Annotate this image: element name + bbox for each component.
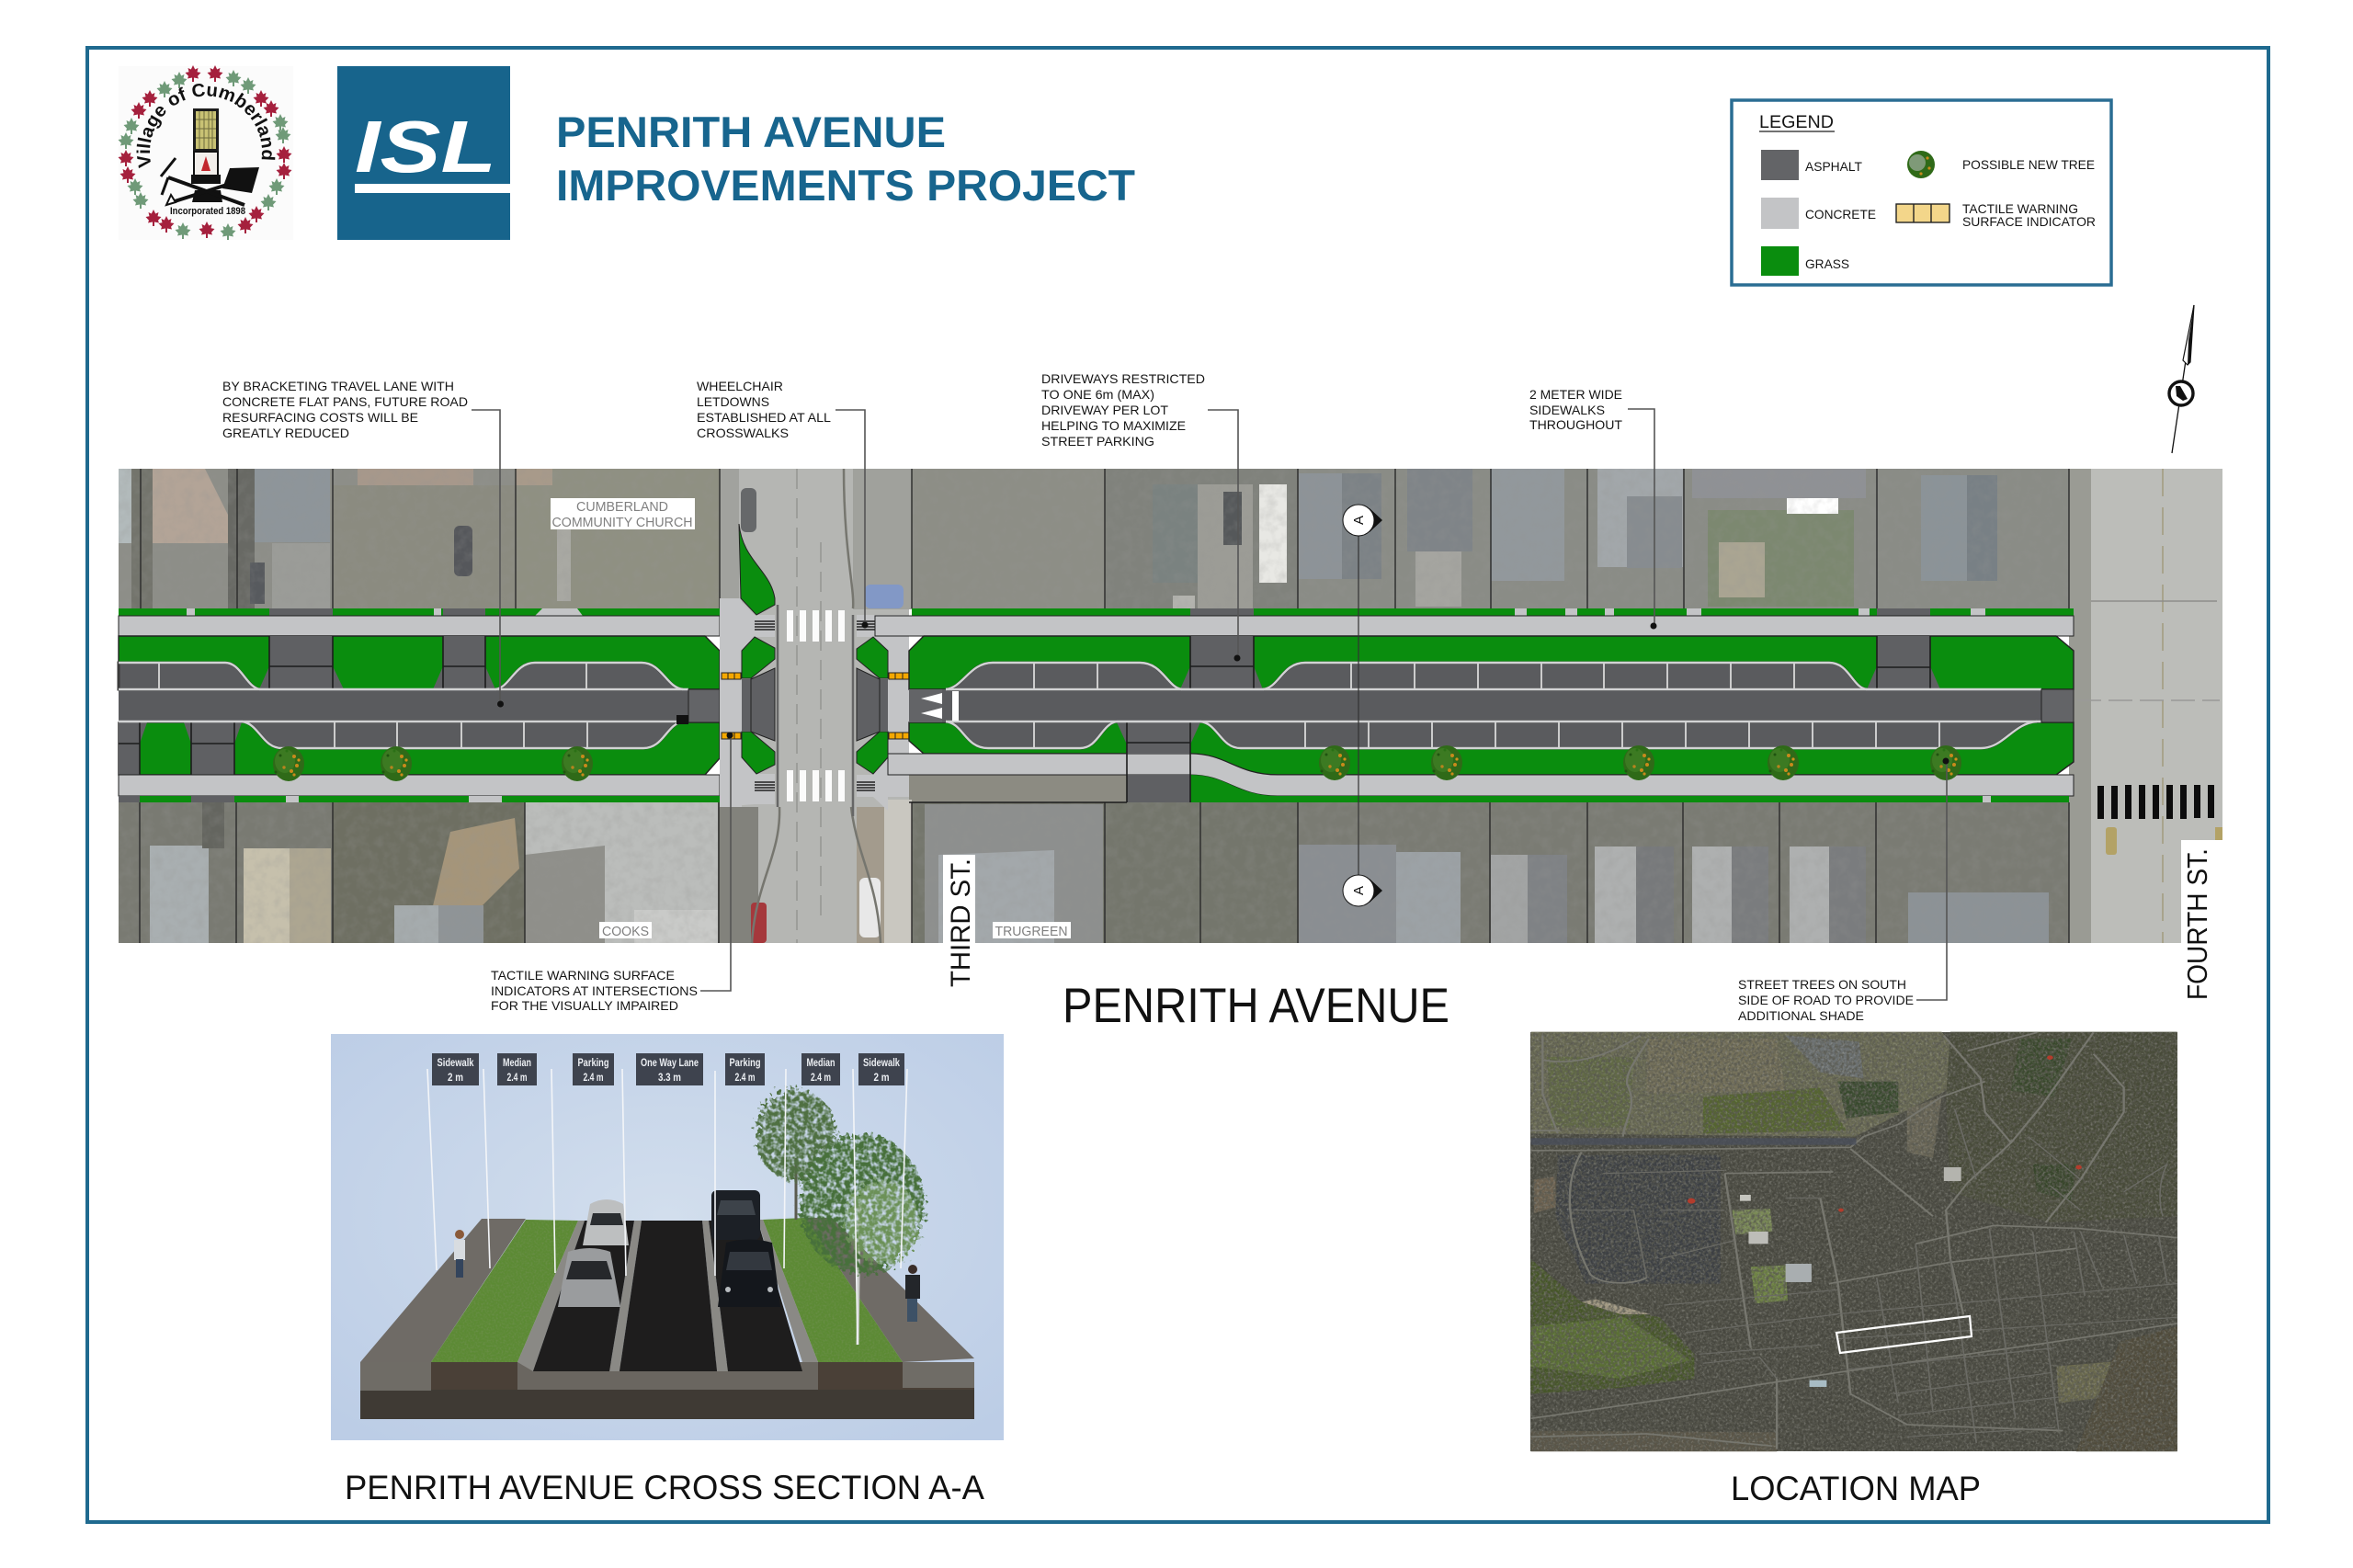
aerial: north side east block — [912, 469, 2069, 609]
tag: parking left: 2.4 m — [583, 1071, 603, 1084]
lane arrows — [921, 691, 959, 721]
sidewalks — [360, 1218, 974, 1362]
pedestrian right — [905, 1265, 920, 1322]
legend item: asphalt — [1761, 150, 1862, 180]
tag: one way lane: 3.3 m — [658, 1071, 681, 1084]
callout: 2 meter sidewalks: 2 METER WIDE — [1529, 387, 1622, 402]
panel: legend — [1732, 100, 2111, 285]
tag: sidewalk left: 2 m — [448, 1071, 463, 1084]
panel: legend: LEGEND — [1759, 113, 1834, 132]
grass texture left — [431, 1220, 578, 1362]
tag: parking left — [573, 1053, 614, 1085]
north boulevard — [119, 636, 720, 689]
map buildings — [1531, 1055, 2082, 1387]
curb lines at Third St — [778, 605, 853, 816]
crosswalk at Fourth St — [2097, 785, 2214, 819]
trees — [756, 1089, 925, 1345]
aerial: Fourth Street roadway — [2069, 469, 2222, 943]
legend item: grass: GRASS — [1805, 256, 1849, 271]
south green strip east — [1190, 775, 2069, 802]
dimension tags — [432, 1053, 904, 1085]
map dark speckle — [1530, 1032, 2177, 1451]
tag: median left — [497, 1053, 537, 1085]
tag: one way lane: One Way Lane — [641, 1056, 699, 1069]
callout: wheelchair letdowns: ESTABLISHED AT ALL — [697, 410, 831, 425]
section marker top: A — [1351, 516, 1367, 525]
title — [556, 108, 1135, 210]
aerial: south side west block — [119, 802, 720, 943]
crosswalks at Third St — [787, 610, 845, 801]
section marker top — [1343, 505, 1382, 536]
callout: street trees: SIDE OF ROAD TO PROVIDE — [1738, 993, 1914, 1007]
driveways south — [119, 722, 242, 775]
pedestrian left — [454, 1230, 465, 1278]
lane end block — [688, 689, 720, 722]
curved south sidewalk — [888, 754, 2074, 796]
callout: concrete flat pans: BY BRACKETING TRAVEL LANE WITH — [222, 379, 454, 393]
legend item: tactile warning surface indicator: TACTILE WARNING — [1962, 201, 2078, 216]
legend item: possible new tree: POSSIBLE NEW TREE — [1962, 157, 2095, 172]
street label: Fourth St: FOURTH ST. — [2181, 848, 2213, 1000]
small south strip crossing — [1983, 796, 1991, 802]
tag: sidewalk left — [432, 1053, 479, 1085]
driveways north east — [1180, 636, 1940, 689]
caption: location map: LOCATION MAP — [1731, 1470, 1981, 1507]
tag: median right — [801, 1053, 840, 1085]
aerial: Third Street roadway — [720, 469, 912, 943]
callout: concrete flat pans: RESURFACING COSTS WILL BE — [222, 410, 418, 425]
tag: one way lane — [636, 1053, 703, 1085]
tactile indicators west — [722, 673, 741, 739]
lane edges east — [946, 689, 2041, 722]
south boulevard strip — [119, 796, 720, 802]
aerial: south side east block — [909, 775, 2069, 943]
parking bays west — [119, 663, 683, 748]
callout: driveways restricted: DRIVEWAY PER LOT — [1041, 403, 1168, 417]
icon: north arrow — [2169, 305, 2194, 453]
panel: street plan with aerial background — [119, 469, 2222, 943]
panel: cross section A-A rendering — [331, 1034, 1004, 1440]
tag: parking left: Parking — [577, 1056, 608, 1069]
south sidewalk — [119, 775, 720, 796]
legend item: grass — [1761, 246, 1849, 276]
tag: sidewalk right — [858, 1053, 904, 1085]
car: black truck — [711, 1190, 760, 1240]
logo: Village of Cumberland crest: Incorporated 1898 — [170, 206, 245, 217]
street surface: east block — [875, 608, 2074, 802]
label: Cooks: COOKS — [602, 924, 649, 939]
soil and gravel layers — [360, 1362, 974, 1419]
tag: parking right: Parking — [730, 1056, 761, 1069]
callout: driveways restricted: HELPING TO MAXIMIZE — [1041, 418, 1186, 433]
logo: Village of Cumberland crest — [118, 65, 292, 240]
title: PENRITH AVENUE — [556, 108, 946, 156]
section marker bottom — [1343, 875, 1382, 906]
callout: concrete flat pans: GREATLY REDUCED — [222, 426, 349, 440]
callout: wheelchair letdowns: CROSSWALKS — [697, 426, 789, 440]
pedestrians — [454, 1230, 920, 1322]
callout: driveways restricted: STREET PARKING — [1041, 434, 1154, 449]
asphalt road — [533, 1220, 802, 1371]
travel lane east — [909, 689, 2074, 722]
grass medians — [431, 1218, 903, 1362]
tag: parking right: 2.4 m — [735, 1071, 756, 1084]
tag: median left: Median — [503, 1056, 531, 1069]
callout: 2 meter sidewalks: THROUGHOUT — [1529, 417, 1622, 432]
south boulevard — [119, 722, 720, 775]
south boulevard east — [909, 722, 2074, 775]
callout: street trees — [1738, 757, 1949, 1023]
north boulevard east — [909, 636, 2074, 689]
street surface: east curb bulbs at Third St — [857, 615, 909, 811]
legend item: possible new tree — [1907, 151, 2095, 178]
tag: sidewalk right: 2 m — [873, 1071, 890, 1084]
lane edges west — [119, 689, 688, 722]
aerial texture — [119, 469, 2069, 609]
lane end block at Third St — [909, 689, 942, 722]
north sidewalk east — [875, 616, 2074, 636]
parking bays east — [946, 663, 2037, 748]
car: silver rear — [583, 1199, 629, 1245]
heading: Penrith Avenue: PENRITH AVENUE — [1063, 979, 1449, 1033]
car: silver front — [558, 1248, 620, 1307]
callout: wheelchair letdowns: WHEELCHAIR — [697, 379, 783, 393]
car: black sedan — [718, 1239, 780, 1307]
tag: median right: 2.4 m — [811, 1071, 831, 1084]
logo: Village of Cumberland crest: Village of Cumberland — [136, 84, 276, 169]
tactile indicators east — [889, 673, 909, 739]
label: Cumberland Community Church: COMMUNITY CHURCH — [551, 515, 693, 530]
dark driveway crossings — [909, 722, 1200, 802]
aerial: north side west block — [119, 469, 720, 609]
title: IMPROVEMENTS PROJECT — [556, 161, 1135, 210]
lane end block east — [2041, 689, 2074, 722]
logo: ISL — [337, 66, 510, 240]
north sidewalk — [119, 616, 720, 636]
callout: street trees: STREET TREES ON SOUTH — [1738, 977, 1906, 992]
legend item: concrete: CONCRETE — [1805, 207, 1876, 222]
tag: median right: Median — [807, 1056, 835, 1069]
tag: sidewalk left: Sidewalk — [438, 1056, 474, 1069]
aerial texture south — [119, 802, 2069, 943]
callout: wheelchair letdowns — [697, 379, 868, 629]
legend item: asphalt: ASPHALT — [1805, 159, 1862, 174]
section marker bottom: A — [1351, 886, 1367, 895]
label: Cumberland Community Church: CUMBERLAND — [576, 499, 668, 515]
ramp stripes — [755, 621, 775, 790]
callout: street trees: ADDITIONAL SHADE — [1738, 1008, 1864, 1023]
callout: concrete flat pans — [222, 379, 504, 708]
new street trees — [273, 745, 1961, 781]
property lines — [140, 469, 2069, 943]
street surface: west block — [119, 608, 720, 802]
tag: median left: 2.4 m — [507, 1071, 528, 1084]
label: Trugreen: TRUGREEN — [995, 924, 1068, 939]
logo: ISL: ISL — [355, 106, 496, 187]
grass texture right — [763, 1218, 903, 1362]
legend item: concrete — [1761, 198, 1876, 229]
callout: tactile warning: INDICATORS AT INTERSECTIONS — [491, 983, 698, 998]
callout: 2 meter sidewalks: SIDEWALKS — [1529, 403, 1605, 417]
north boulevard strip east — [912, 608, 2074, 616]
callout: concrete flat pans: CONCRETE FLAT PANS, FUTURE ROAD — [222, 394, 468, 409]
one-way sign marker — [676, 715, 688, 724]
street label: Third St: THIRD ST. — [946, 858, 976, 987]
callout: wheelchair letdowns: LETDOWNS — [697, 394, 769, 409]
caption: cross section: PENRITH AVENUE CROSS SECTION A-A — [345, 1469, 984, 1506]
legend item: tactile warning surface indicator — [1896, 201, 2096, 229]
callout: driveways restricted: TO ONE 6m (MAX) — [1041, 387, 1154, 402]
map light speckle — [1530, 1032, 2177, 1451]
section line A-A — [1343, 505, 1382, 906]
tag: parking right — [725, 1053, 765, 1085]
callout: driveways restricted: DRIVEWAYS RESTRICTED — [1041, 371, 1205, 386]
callout: 2 meter sidewalks — [1529, 387, 1656, 629]
north boulevard strip — [119, 608, 720, 616]
map: project area outline — [1836, 1316, 1972, 1353]
callout: tactile warning — [491, 732, 733, 1013]
travel lane west — [119, 689, 720, 722]
panel: location map — [1530, 1032, 2177, 1451]
measurement poles — [427, 1069, 907, 1345]
legend item: tactile warning surface indicator: SURFACE INDICATOR — [1962, 214, 2096, 229]
map roads — [1531, 1032, 2177, 1449]
driveways north — [259, 636, 495, 689]
street surface: west curb bulbs at Third St — [720, 524, 775, 807]
map land cover — [1531, 1032, 2177, 1451]
callout: tactile warning: TACTILE WARNING SURFACE — [491, 968, 675, 983]
callout: driveways restricted — [1041, 371, 1241, 662]
label: Cumberland Community Church — [551, 498, 695, 530]
vehicles — [558, 1190, 780, 1307]
tag: sidewalk right: Sidewalk — [863, 1056, 900, 1069]
callout: tactile warning: FOR THE VISUALLY IMPAIRED — [491, 998, 678, 1013]
curbs — [517, 1220, 818, 1371]
